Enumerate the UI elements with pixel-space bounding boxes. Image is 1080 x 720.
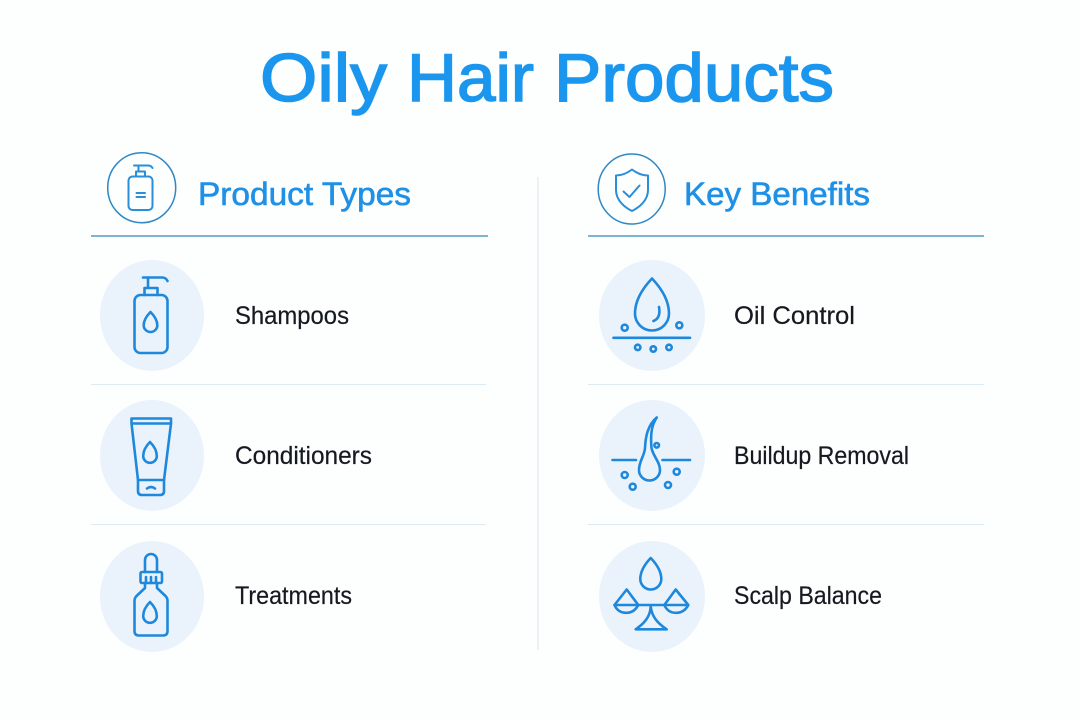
item: buildup removal — [599, 400, 909, 511]
icon: header pump bottle — [108, 153, 176, 223]
icon: balance scale — [599, 541, 705, 652]
icon: shampoo bottle — [100, 260, 204, 371]
item: conditioners — [100, 400, 372, 511]
label: scalp balance: Scalp Balance — [734, 582, 882, 610]
title: Products — [554, 40, 834, 116]
label: treatments: Treatments — [235, 582, 352, 610]
panel: key benefits — [588, 154, 984, 652]
item: oil control — [599, 260, 855, 371]
icon: dropper bottle — [100, 541, 204, 652]
label: shampoos: Shampoos — [235, 302, 349, 330]
heading: product types: Product Types — [198, 176, 411, 212]
title — [260, 40, 834, 116]
item: scalp balance — [599, 541, 882, 652]
heading: key benefits: Key Benefits — [684, 176, 870, 212]
title: Hair — [407, 40, 534, 116]
icon: hair follicle — [599, 400, 705, 511]
item: treatments — [100, 541, 352, 652]
title: Oily — [260, 40, 387, 116]
icon: conditioner tube — [100, 400, 204, 511]
label: oil control: Oil Control — [734, 302, 855, 330]
label: buildup removal: Buildup Removal — [734, 442, 909, 470]
center divider — [537, 177, 539, 650]
icon: header shield — [598, 154, 665, 224]
panel: product types — [91, 153, 488, 652]
icon: oil drop — [599, 260, 705, 371]
label: conditioners: Conditioners — [235, 442, 372, 470]
item: shampoos — [100, 260, 349, 371]
